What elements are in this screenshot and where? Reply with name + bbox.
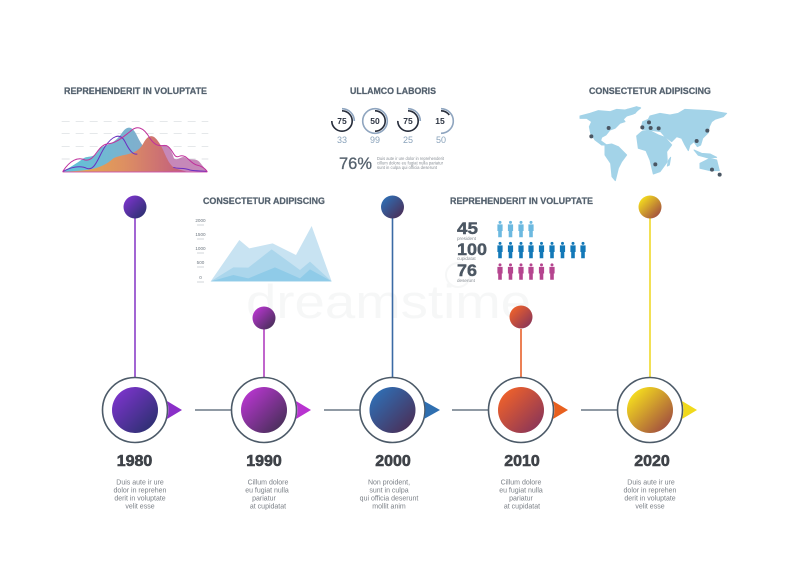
heading: consectetur middle: CONSECTETUR ADIPISCING <box>203 196 325 207</box>
milestone 2010: at cupidatat <box>504 504 540 510</box>
milestone 2020: dolor in reprehen <box>624 488 677 494</box>
pictogram row: 45 president: 45 <box>457 219 478 238</box>
pictogram row: 100 cupidatat: cupidatat <box>457 256 476 261</box>
pictogram row: 100 cupidatat <box>457 240 586 261</box>
milestone 2010: Cillum dolore <box>501 480 542 486</box>
pictogram row: 45 president: president <box>457 236 477 241</box>
milestone 2010: 2010 <box>504 453 540 470</box>
world map with location dots <box>580 107 727 181</box>
gauge 75 / 33: 33 <box>337 135 347 145</box>
stat description: sunt in culpa qui officia deserunt <box>377 165 438 170</box>
gauge 75 / 25: 75 <box>403 116 413 126</box>
milestone 2000 <box>360 196 440 510</box>
milestone 2000: 2000 <box>375 453 411 470</box>
chart: layered blue area chart: 1500 <box>195 232 206 237</box>
milestone 1990: Cillum dolore <box>248 480 289 486</box>
milestone 1980 <box>102 196 182 510</box>
gauge 75 / 25: 25 <box>403 135 413 145</box>
pictogram row: 100 cupidatat: 100 <box>457 240 487 259</box>
milestone 1980: Duis aute ir ure <box>116 480 164 486</box>
milestone 1980: velit esse <box>125 504 155 510</box>
milestone 2000: Non proident, <box>368 480 410 486</box>
milestone 2010: pariatur <box>509 496 534 502</box>
milestone 1990: eu fugiat nulla <box>245 488 289 494</box>
milestone 2000: sunt in culpa <box>369 488 409 494</box>
milestone 1990: 1990 <box>246 453 282 470</box>
gauge 50 / 99: 50 <box>370 116 380 126</box>
heading: reprehenderit top left: REPREHENDERIT IN VOLUPTATE <box>64 86 207 97</box>
stat description: cillum dolore eu fugiat nulla pariatur <box>377 160 444 166</box>
gauge 50 / 99: 99 <box>370 135 380 145</box>
milestone 2020: Duis aute ir ure <box>627 480 675 486</box>
pictogram row: 45 president <box>457 219 534 241</box>
chart: overlapping area and line chart <box>62 122 208 172</box>
milestone 2010: eu fugiat nulla <box>499 488 543 494</box>
pictogram row: 76 deserunt: deserunt <box>457 278 476 283</box>
milestone 2020 <box>618 196 697 510</box>
gauge 75 / 25 <box>396 109 420 145</box>
milestone 2000: mollit anim <box>372 504 406 510</box>
milestone 1990: at cupidatat <box>250 504 286 510</box>
chart: layered blue area chart: 500 <box>197 260 205 265</box>
stat description: Duis aute ir ure dolor in reprehenderit <box>377 156 445 161</box>
milestone 1980: 1980 <box>117 453 152 470</box>
heading: consectetur top right: CONSECTETUR ADIPISCING <box>589 86 711 97</box>
milestone 2020: velit esse <box>635 504 665 510</box>
gauge 75 / 33 <box>330 109 354 145</box>
chart: layered blue area chart: 2000 <box>195 218 206 223</box>
gauge 50 / 99 <box>363 109 387 145</box>
milestone 2000: qui officia deserunt <box>360 496 418 502</box>
milestone 1990: pariatur <box>252 496 277 502</box>
milestone 1980: derit in voluptate <box>114 496 166 502</box>
gauge 15 / 50 <box>429 109 453 145</box>
connector lines between milestones <box>195 409 617 411</box>
stat: 76 percent: 76% <box>339 154 372 173</box>
pictogram row: 76 deserunt: 76 <box>457 261 477 280</box>
gauge 15 / 50: 50 <box>436 135 446 145</box>
milestone 2020: derit in voluptate <box>624 496 676 502</box>
milestone 2020: 2020 <box>634 453 670 470</box>
milestone 1990 <box>232 306 311 510</box>
gauge 15 / 50: 15 <box>435 116 445 126</box>
pictogram row: 76 deserunt <box>457 261 555 283</box>
chart: layered blue area chart: 1000 <box>195 246 206 251</box>
milestone 1980: dolor in reprehen <box>114 488 167 494</box>
watermark: dreamstime <box>246 275 531 328</box>
milestone 2010 <box>488 306 568 510</box>
stat description <box>377 156 445 170</box>
gauge 75 / 33: 75 <box>337 116 347 126</box>
heading: reprehenderit middle right: REPREHENDERIT IN VOLUPTATE <box>450 196 593 207</box>
heading: ullamco laboris: ULLAMCO LABORIS <box>350 86 436 97</box>
chart: layered blue area chart <box>195 218 332 282</box>
chart: layered blue area chart: 0 <box>199 275 202 280</box>
